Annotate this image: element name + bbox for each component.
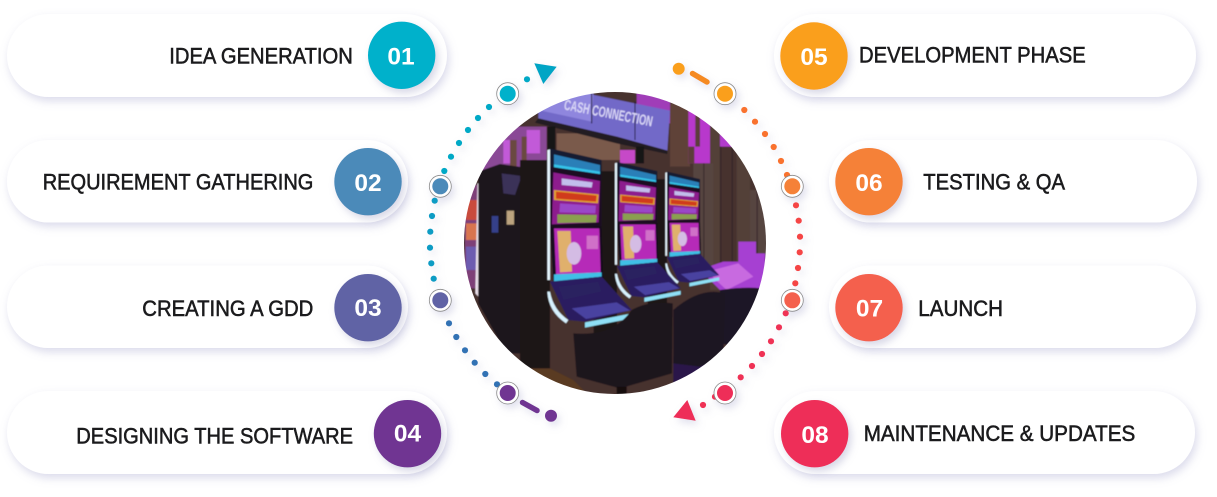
label: testing and qa: TESTING & QA (923, 169, 1065, 194)
badge 04: 04 (394, 421, 421, 448)
photo: slot machines in a purple-lit casino (460, 90, 770, 400)
node 03 (429, 289, 451, 311)
badge 05 (780, 22, 848, 90)
dash and end dot: purple (522, 402, 557, 422)
badge 03: 03 (354, 295, 382, 322)
start dot and dash: orange (673, 63, 707, 82)
node 05 (714, 83, 736, 105)
badge 08 (781, 400, 848, 467)
badge 07 (835, 274, 903, 341)
badge 01: 01 (387, 44, 415, 70)
arrowhead: teal (534, 63, 557, 84)
step 03: creating a gdd (7, 266, 408, 348)
badge 04 (374, 400, 441, 467)
badge 06: 06 (855, 170, 883, 197)
node 07 (781, 289, 803, 311)
badge 06 (835, 148, 903, 215)
step 04: designing the software (7, 391, 447, 474)
label: launch: LAUNCH (918, 296, 1003, 321)
arrowhead: red (673, 400, 696, 421)
step 07: launch (829, 266, 1196, 348)
node 01 (497, 83, 519, 105)
badge 03 (334, 274, 402, 341)
node 04 (497, 382, 519, 404)
step 06: testing and qa (829, 140, 1197, 222)
label: idea generation: IDEA GENERATION (169, 43, 353, 68)
badge 02: 02 (354, 170, 382, 197)
badge 08: 08 (801, 422, 829, 449)
badge 05: 05 (800, 44, 828, 71)
label: development phase: DEVELOPMENT PHASE (859, 43, 1086, 68)
label: requirement gathering: REQUIREMENT GATHERING (43, 170, 313, 195)
badge 01 (368, 22, 435, 89)
node 06 (781, 175, 803, 197)
photo: slot machines in a purple-lit casino: CASH CONNECTION (563, 98, 654, 130)
step 05: development phase (774, 14, 1196, 97)
label: creating a gdd: CREATING A GDD (142, 296, 313, 321)
node 02 (429, 175, 451, 197)
step 01: idea generation (7, 14, 447, 97)
badge 07: 07 (856, 295, 883, 322)
node 08 (714, 382, 736, 404)
step 08: maintenance and updates (774, 391, 1195, 474)
step 02: requirement gathering (7, 140, 408, 222)
right arc: dotted path with arrowhead (673, 63, 803, 421)
label: maintenance and updates: MAINTENANCE & UPDATES (864, 421, 1135, 446)
label: designing the software: DESIGNING THE SOFTWARE (76, 424, 353, 449)
left arc: dotted path with arrowhead (427, 63, 557, 422)
badge 02 (334, 148, 402, 215)
